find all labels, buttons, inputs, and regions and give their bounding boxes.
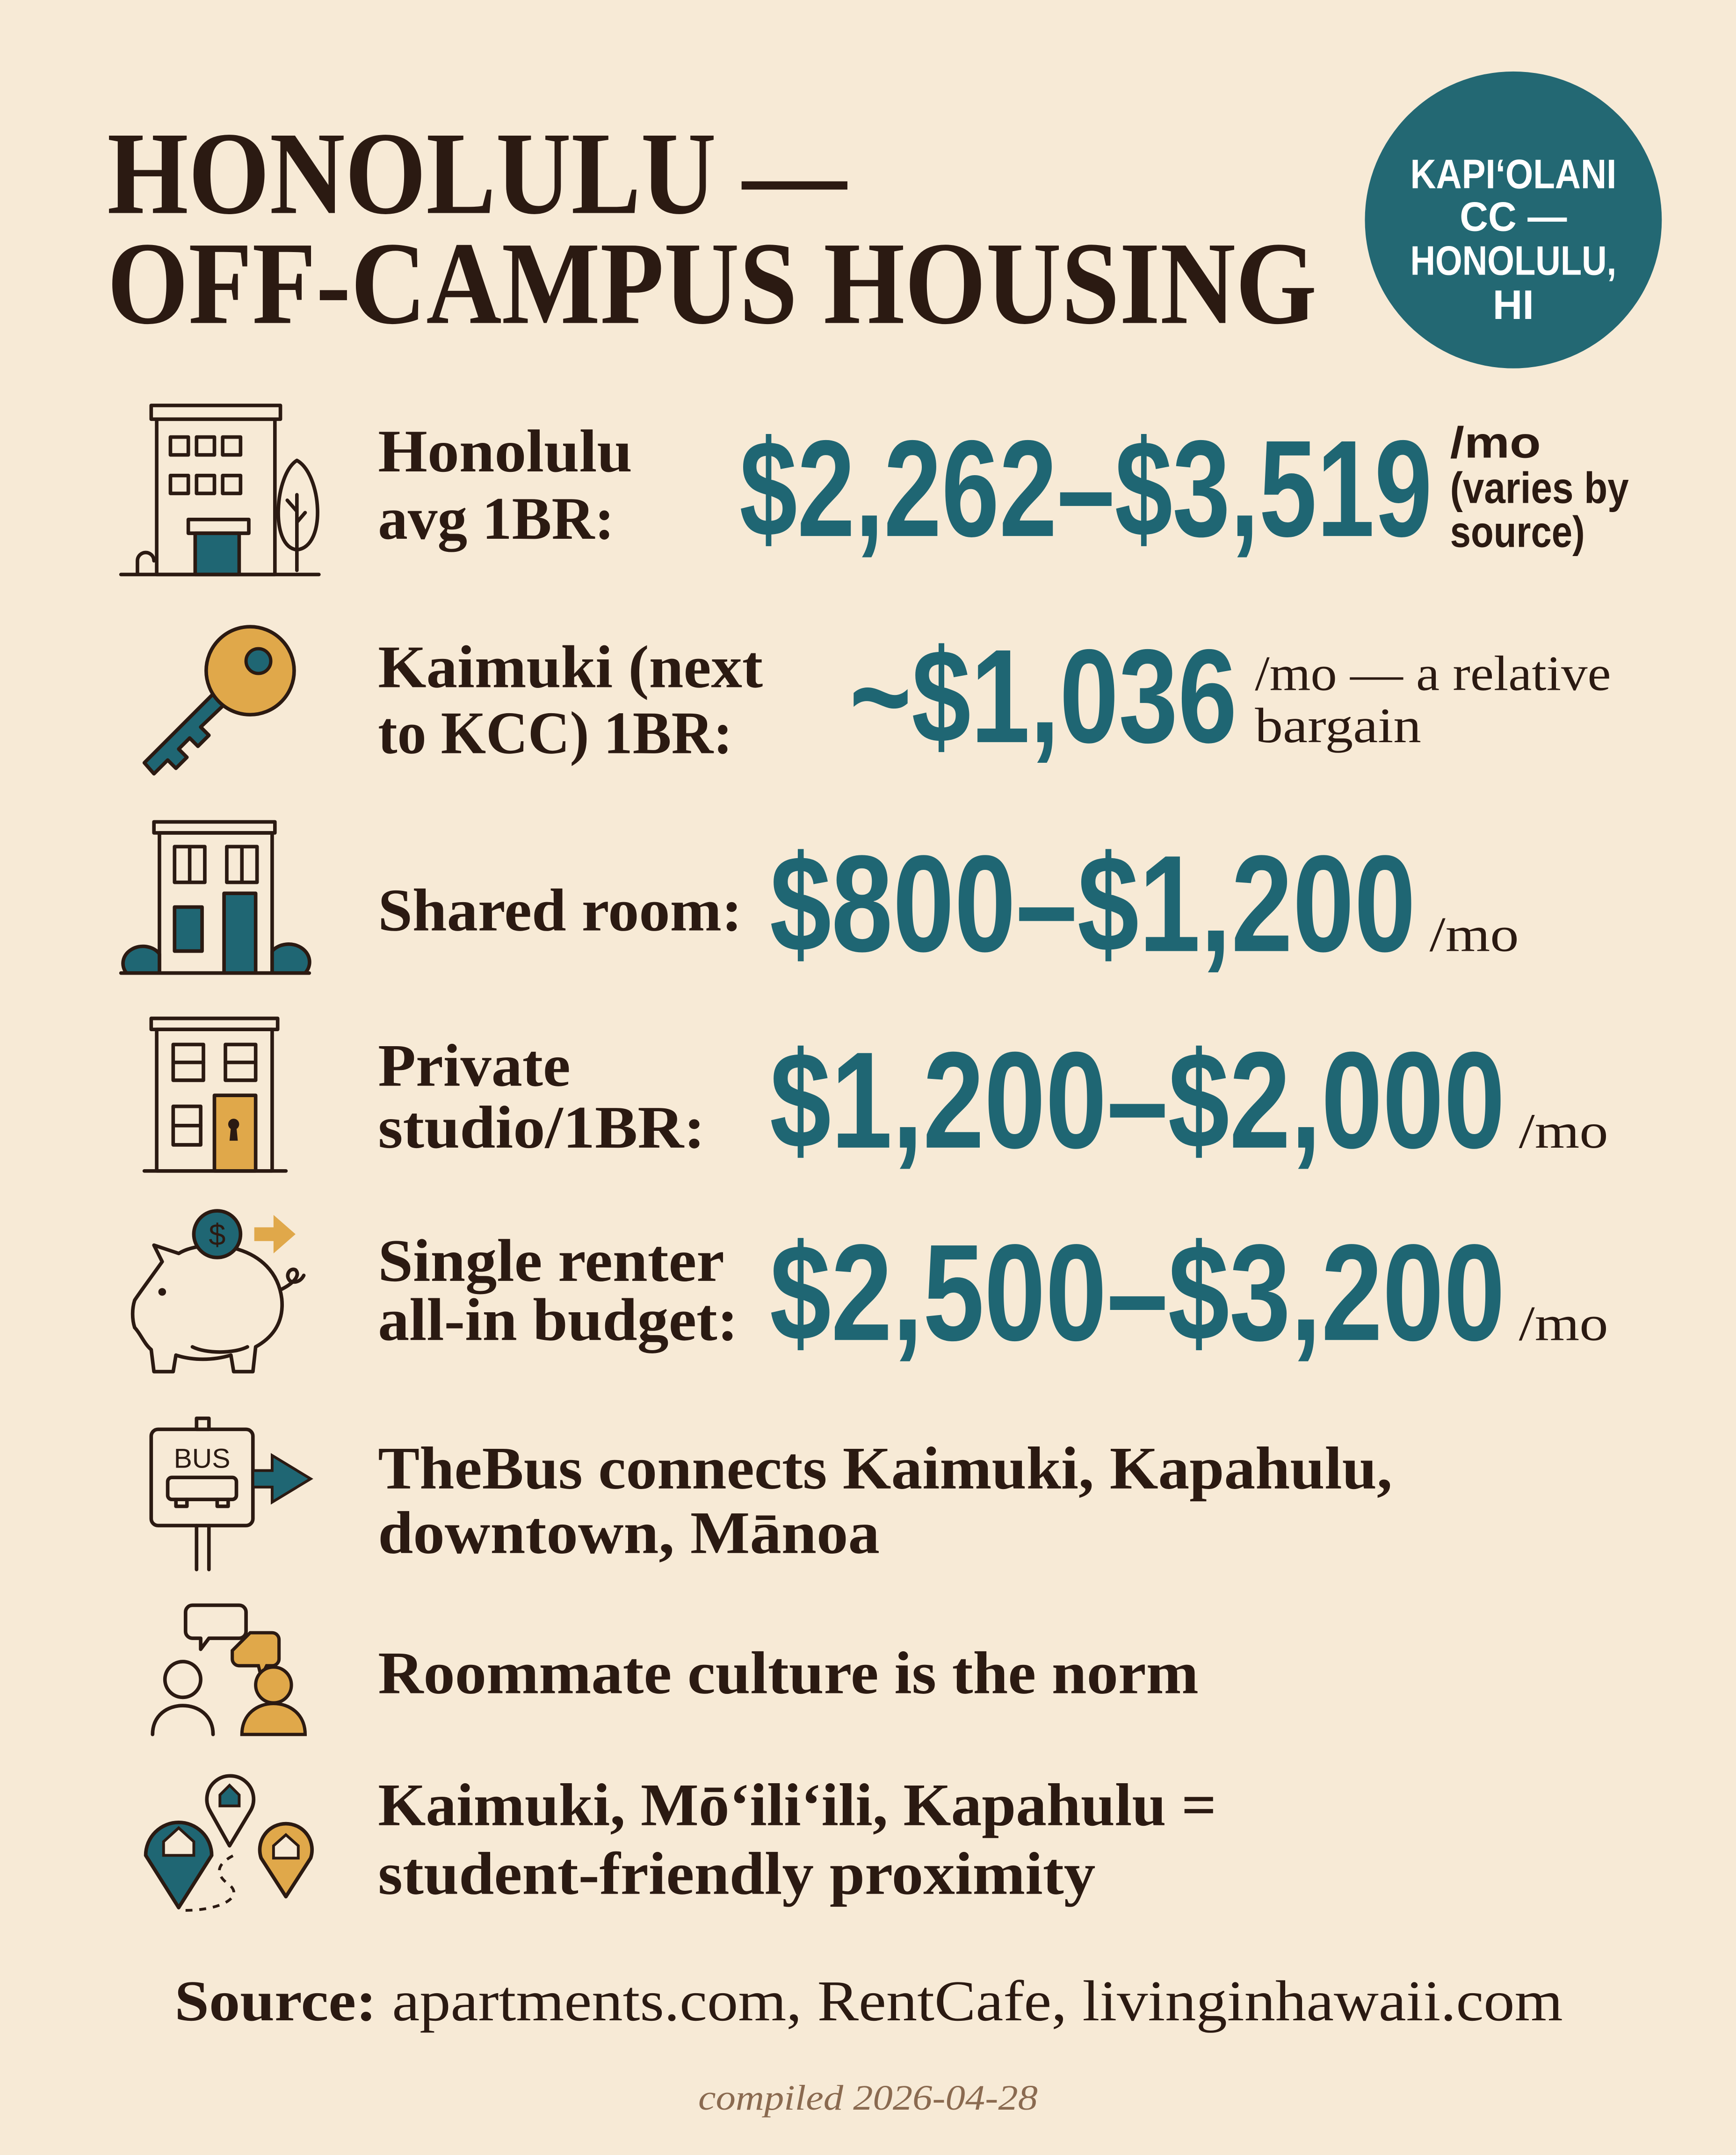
row 1: Honolulu avg 1BR: /mo xyxy=(1450,418,1541,467)
row 5: single renter budget xyxy=(133,1211,1608,1372)
badge: Kapi'olani CC: KAPIʻOLANI xyxy=(1410,151,1616,197)
icon: key xyxy=(145,627,294,774)
row 6: TheBus: TheBus connects Kaimuki, Kapahulu, xyxy=(378,1435,1392,1502)
badge: Kapi'olani CC xyxy=(1365,72,1662,369)
icon: house with orange door xyxy=(145,1019,286,1171)
row 2: Kaimuki 1BR: ~$1,036 xyxy=(849,622,1237,771)
icon: piggy bank xyxy=(133,1211,304,1372)
row 5: single renter budget: all-in budget: xyxy=(378,1286,738,1353)
row 6: TheBus xyxy=(151,1418,1392,1569)
row 8: student-friendly neighborhoods: student-friendly proximity xyxy=(378,1840,1095,1907)
title xyxy=(107,108,1317,349)
icon: house with teal door xyxy=(121,822,310,973)
row 1: Honolulu avg 1BR: Honolulu xyxy=(378,418,632,485)
badge: Kapi'olani CC: CC — xyxy=(1460,194,1567,240)
row 4: private studio: $1,200–$2,000 xyxy=(770,1024,1505,1177)
row 1: Honolulu avg 1BR: $2,262–$3,519 xyxy=(739,412,1432,565)
source line: Source: apartments.com, RentCafe, livinginhawaii.com xyxy=(174,1969,1563,2033)
icon: apartment building xyxy=(121,405,319,574)
row 5: single renter budget: /mo xyxy=(1519,1296,1608,1351)
row 3: shared room: Shared room: xyxy=(378,877,742,944)
row 5: single renter budget: Single renter xyxy=(378,1227,724,1294)
row 4: private studio: /mo xyxy=(1519,1104,1608,1158)
title: HONOLULU — xyxy=(107,108,847,239)
row 1: Honolulu avg 1BR: source) xyxy=(1450,507,1585,557)
title: OFF-CAMPUS HOUSING xyxy=(107,218,1317,349)
row 2: Kaimuki 1BR: /mo — a relative xyxy=(1255,646,1611,701)
badge: Kapi'olani CC: HI xyxy=(1493,282,1534,328)
row 4: private studio: Private xyxy=(378,1032,571,1099)
row 6: TheBus: downtown, Mānoa xyxy=(378,1499,880,1566)
row 2: Kaimuki 1BR xyxy=(145,622,1611,774)
icon: roommates xyxy=(152,1605,305,1735)
row 8: student-friendly neighborhoods: Kaimuki, Mōʻiliʻili, Kapahulu = xyxy=(378,1772,1216,1838)
row 8: student-friendly neighborhoods xyxy=(146,1772,1216,1910)
icon: bus stop sign xyxy=(151,1418,311,1569)
row 3: shared room: $800–$1,200 xyxy=(770,827,1416,981)
row 2: Kaimuki 1BR: bargain xyxy=(1255,698,1421,753)
row 1: Honolulu avg 1BR: (varies by xyxy=(1450,463,1629,513)
compiled date: compiled 2026-04-28 xyxy=(698,2078,1038,2118)
icon: map pins xyxy=(146,1776,312,1910)
row 4: private studio xyxy=(145,1019,1608,1177)
row 1: Honolulu avg 1BR xyxy=(121,405,1629,574)
icon: bus stop sign: BUS xyxy=(174,1444,230,1474)
row 1: Honolulu avg 1BR: avg 1BR: xyxy=(378,485,615,552)
row 2: Kaimuki 1BR: to KCC) 1BR: xyxy=(378,699,733,766)
row 3: shared room xyxy=(121,822,1519,981)
badge: Kapi'olani CC: HONOLULU, xyxy=(1410,238,1616,284)
row 7: roommate culture xyxy=(152,1605,1199,1735)
row 2: Kaimuki 1BR: Kaimuki (next xyxy=(378,633,763,700)
row 3: shared room: /mo xyxy=(1430,907,1519,962)
row 7: roommate culture: Roommate culture is the norm xyxy=(378,1640,1199,1707)
row 4: private studio: studio/1BR: xyxy=(378,1094,705,1161)
row 5: single renter budget: $2,500–$3,200 xyxy=(770,1216,1505,1369)
icon: piggy bank: $ xyxy=(209,1218,225,1252)
